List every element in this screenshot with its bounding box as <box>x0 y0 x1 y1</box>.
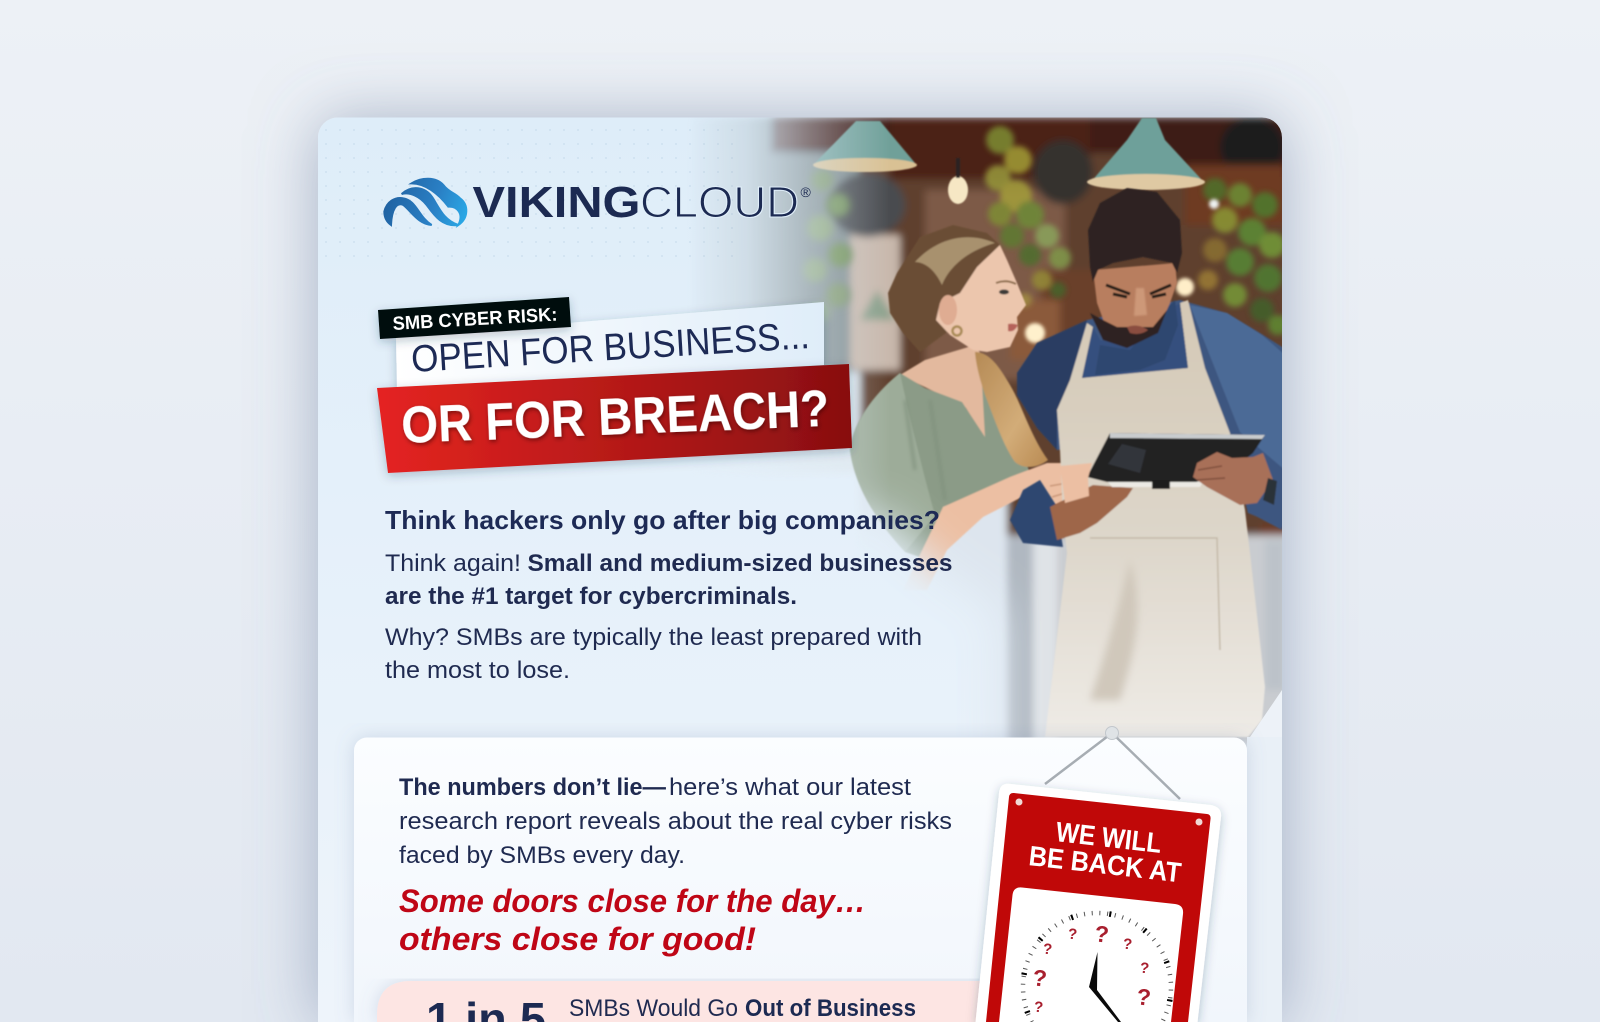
title strip: open for business: OPEN FOR BUSINESS... <box>410 315 811 381</box>
intro text: Small and medium-sized businesses <box>528 550 952 577</box>
person: man <box>1010 188 1290 737</box>
lead paragraph: research report reveals about the real cyber risks <box>399 808 952 835</box>
hanging wire and nail <box>1045 726 1180 799</box>
intro text <box>385 505 952 684</box>
intro text: are the #1 target for cybercriminals. <box>385 583 797 610</box>
clock question marks: ? <box>1033 999 1044 1016</box>
apron pocket and folds <box>1090 538 1220 650</box>
panel: statistics <box>354 738 1247 1022</box>
man shirt <box>1056 299 1282 528</box>
title strip: or for breach <box>377 364 852 473</box>
photo: teal pendant lamps <box>813 118 1205 204</box>
panel: hero card <box>318 117 1290 1022</box>
clock question marks <box>1031 920 1152 1016</box>
tag: smb cyber risk <box>378 297 571 339</box>
infographic canvas <box>251 88 1349 1022</box>
woman blouse <box>850 373 1032 560</box>
lead paragraph <box>399 774 952 869</box>
stat pill: 1 in 5: Out of Business <box>745 995 916 1022</box>
clock question marks: ? <box>1031 964 1048 992</box>
intro text: Why? SMBs are typically the least prepared with <box>385 624 922 651</box>
lead paragraph: here’s what our latest <box>669 774 911 801</box>
logo: ® <box>800 184 812 200</box>
photo: restaurant background <box>690 117 1290 745</box>
man right sleeve cuff <box>1258 517 1282 530</box>
clock question marks: ? <box>1093 920 1110 948</box>
clock hands <box>1089 952 1121 1022</box>
red tagline: Some doors close for the day… <box>399 883 866 919</box>
sign red face <box>986 793 1211 1022</box>
photo: hanging plants <box>985 126 1288 335</box>
intro text: Think again! <box>385 550 521 577</box>
tablet <box>1087 433 1265 489</box>
woman hair and bun <box>888 225 1000 352</box>
clock ticks <box>1023 913 1171 1022</box>
icon: cloud mark <box>384 179 466 225</box>
wristwatch <box>1263 478 1277 505</box>
woman neck and chest <box>900 345 988 440</box>
sign: we will be back at <box>976 726 1221 1022</box>
bottom right card corner <box>1250 690 1282 737</box>
woman ponytail <box>975 352 1048 467</box>
sign board <box>976 784 1221 1022</box>
woman arm and hand <box>911 462 1064 589</box>
sign text: WE WILL <box>1054 816 1163 859</box>
clock question marks: ? <box>1042 941 1053 958</box>
man forearm and sleeve <box>1010 480 1063 547</box>
clock question marks: ? <box>1067 926 1078 943</box>
man apron <box>1045 300 1265 737</box>
title <box>377 297 852 473</box>
sign text <box>1027 816 1183 888</box>
stat pill: 1 in 5: SMBs Would Go <box>569 995 738 1022</box>
wordmark: VIKING <box>472 178 640 227</box>
red tagline <box>399 883 866 957</box>
woman face <box>936 245 1026 352</box>
person: woman <box>849 225 1064 589</box>
tag: smb cyber risk: SMB CYBER RISK: <box>392 305 558 335</box>
dot pattern <box>322 124 742 259</box>
photo: bokeh lights <box>1025 199 1219 343</box>
man hair <box>1088 188 1182 282</box>
woman fingers over tablet <box>1060 463 1092 503</box>
red tagline: others close for good! <box>399 921 756 957</box>
photo: pale plants at left <box>803 169 852 322</box>
intro text: Think hackers only go after big companies? <box>385 505 940 535</box>
title strip: or for breach: OR FOR BREACH? <box>400 380 830 455</box>
logo: CLOUD <box>640 178 799 227</box>
man hand and wrist <box>1193 452 1273 505</box>
lead paragraph: faced by SMBs every day. <box>399 842 685 869</box>
clock face panel <box>999 887 1183 1022</box>
clock question marks: ? <box>1139 960 1150 977</box>
mounting holes <box>1016 798 1202 826</box>
intro text: the most to lose. <box>385 657 570 684</box>
card shadow <box>318 118 1282 1022</box>
lead paragraph: The numbers don’t lie— <box>399 774 666 801</box>
sign text: BE BACK AT <box>1027 840 1183 888</box>
man eyes and brows <box>1106 285 1171 297</box>
man beard <box>1090 310 1167 348</box>
clock question marks: ? <box>1135 983 1152 1011</box>
man face <box>1093 262 1178 328</box>
stat pill: 1 in 5 <box>377 981 1030 1022</box>
clock question marks: ? <box>1122 936 1133 953</box>
logo <box>384 178 812 227</box>
